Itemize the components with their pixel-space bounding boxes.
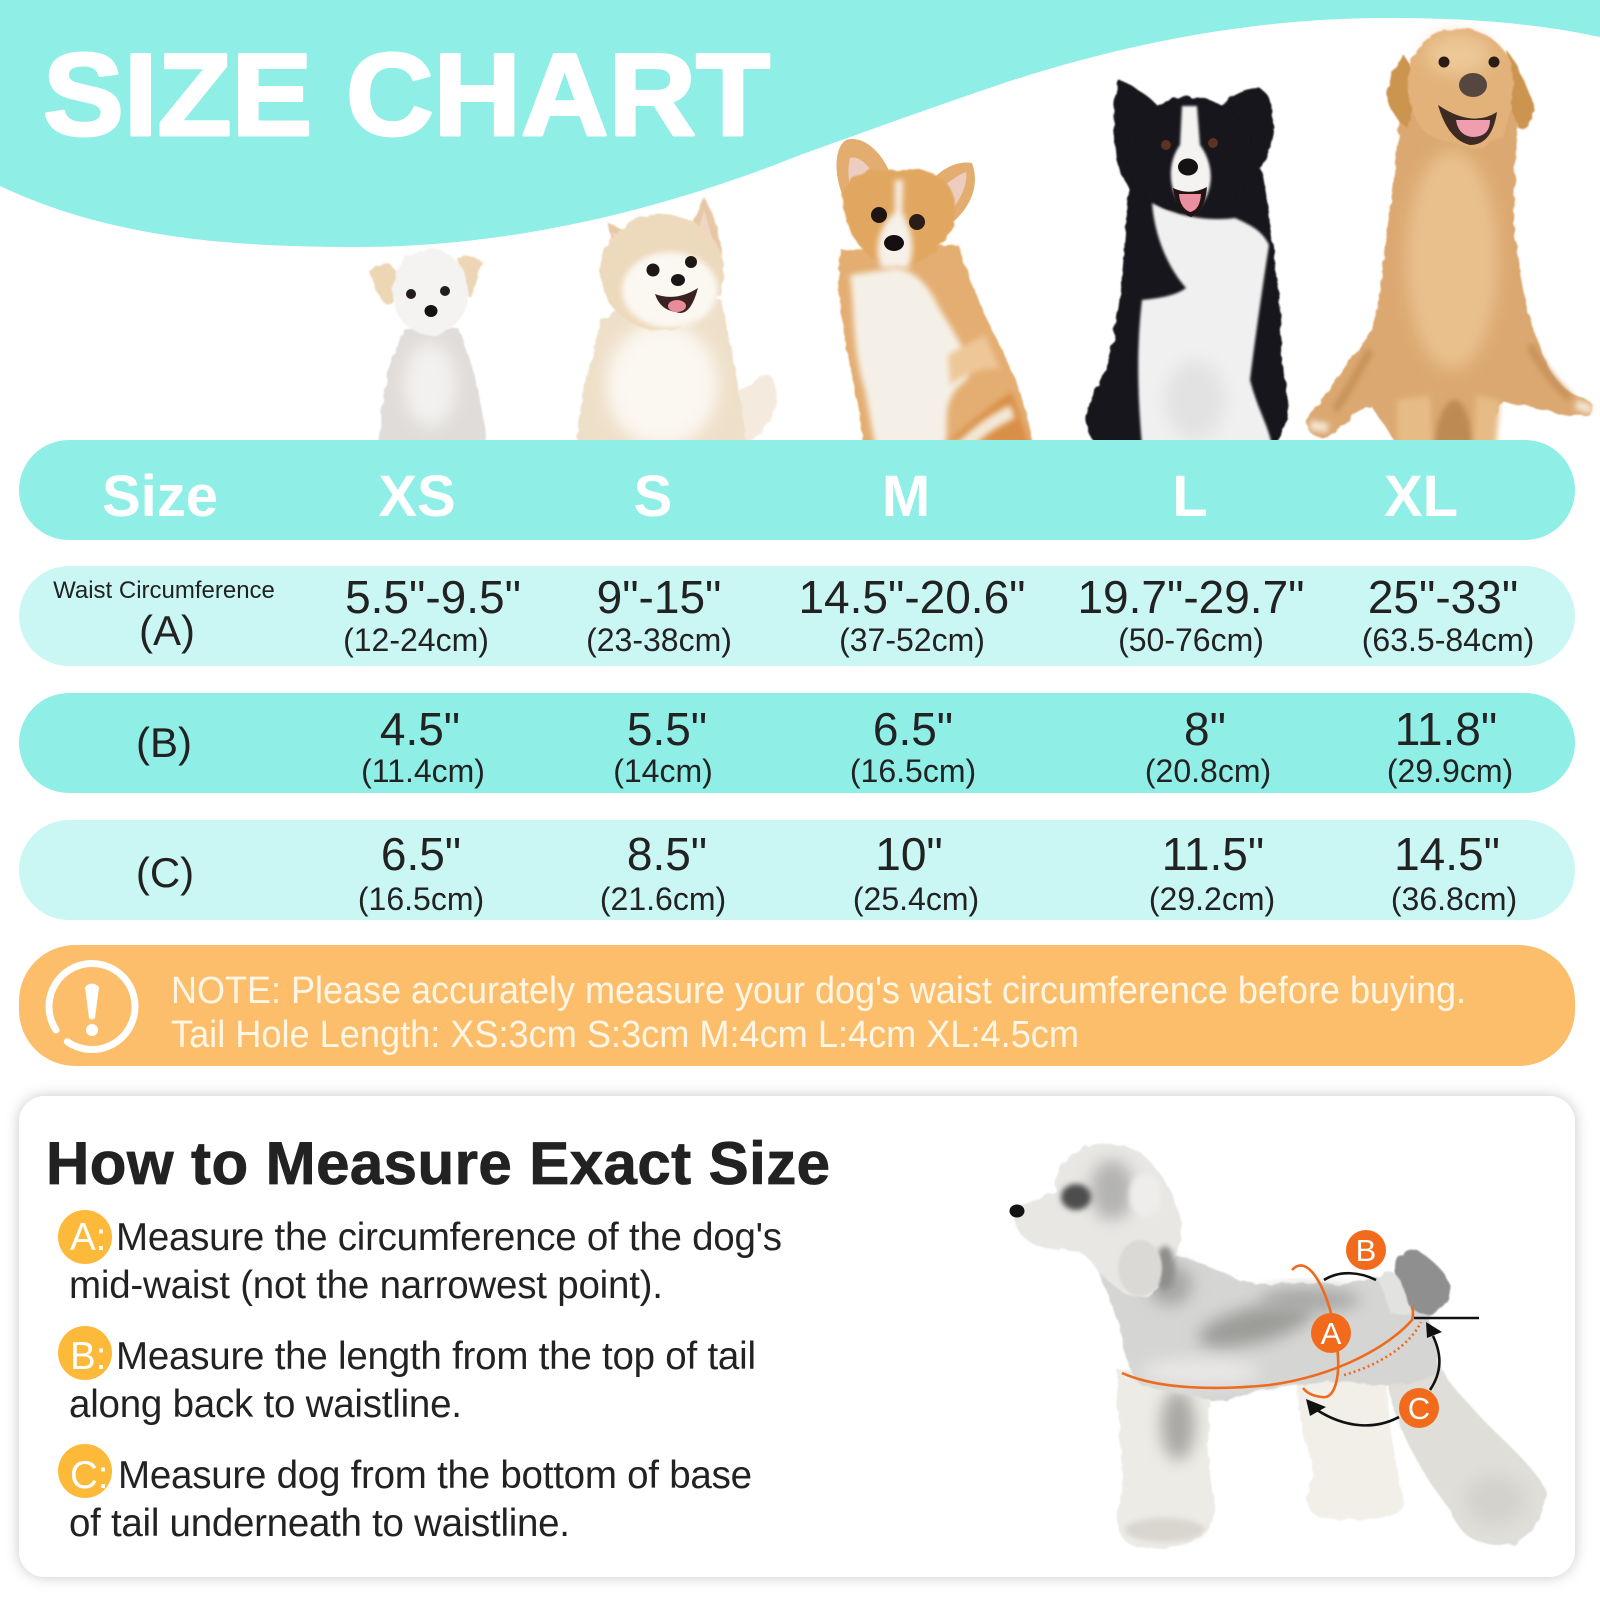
row A: waist circumference: (23-38cm) [586,622,732,658]
header labels: Size [102,464,218,529]
row A: waist circumference: 19.7"-29.7" [1077,571,1305,623]
row B: (14cm) [613,753,713,789]
row C: (C) [136,849,194,896]
step B: along back to waistline. [69,1383,462,1426]
note banner [19,945,1575,1066]
row C: (29.2cm) [1149,881,1275,917]
row C: 11.5" [1162,828,1264,880]
icon: M corgi [836,139,1032,445]
row C: (21.6cm) [600,881,726,917]
dog illustrations row [370,28,1593,447]
row C [19,820,1575,920]
row B: 11.8" [1395,703,1497,755]
step B: Measure the length from the top of tail [116,1335,756,1378]
icon: exclamation [49,964,135,1050]
heading: How to Measure Exact Size [46,1130,830,1197]
step A: mid-waist (not the narrowest point). [69,1264,663,1307]
step B [58,1326,756,1426]
step B: B: [70,1335,106,1378]
row A: waist circumference: (50-76cm) [1118,622,1264,658]
row C: 8.5" [627,828,707,880]
step C [58,1444,752,1545]
tail [1395,1249,1450,1315]
badge C [1399,1388,1439,1428]
header labels: XS [378,464,456,529]
row C: 14.5" [1394,828,1500,880]
step A: A: [70,1216,106,1259]
row C: (16.5cm) [358,881,484,917]
icon: measuring dog photo [1010,1144,1546,1548]
row A: waist circumference: 9"-15" [597,571,721,623]
row A: waist circumference: (63.5-84cm) [1362,622,1534,658]
row C: 10" [875,828,943,880]
row B: (29.9cm) [1387,753,1513,789]
orange measure lines [1122,1265,1421,1397]
step C: Measure dog from the bottom of base [118,1454,752,1497]
row B: (20.8cm) [1145,753,1271,789]
front leg [1117,1370,1214,1548]
row A: waist circumference: 25"-33" [1368,571,1518,623]
row B: (11.4cm) [361,753,485,789]
badge B: B [1356,1233,1376,1268]
row A: waist circumference [19,566,1575,666]
badge A [1311,1313,1351,1353]
row C: 6.5" [381,828,461,880]
icon: L border collie [1086,80,1288,445]
row C: (36.8cm) [1391,881,1517,917]
step A [58,1210,782,1307]
step A: Measure the circumference of the dog's [116,1216,782,1259]
badge A: A [1321,1316,1342,1351]
row B: 5.5" [627,703,707,755]
icon: XL golden retriever [1306,28,1593,445]
note text: NOTE: Please accurately measure your dog's waist circumference before buying. [171,970,1466,1012]
row A: waist circumference: 5.5"-9.5" [345,571,521,623]
row B: (16.5cm) [850,753,976,789]
badge C: C [1408,1391,1430,1426]
row A: waist circumference: (A) [139,607,195,654]
title: SIZE CHART [43,29,770,160]
header labels: S [634,464,672,529]
header labels: XL [1384,464,1458,529]
row A: waist circumference: (37-52cm) [839,622,985,658]
header labels: M [882,464,930,529]
black arrows [1306,1273,1479,1425]
note text [171,970,1466,1056]
step C: of tail underneath to waistline. [69,1502,570,1545]
header wave band [0,0,1600,247]
row A: waist circumference: 14.5"-20.6" [798,571,1026,623]
row C: (25.4cm) [853,881,979,917]
table header pill [19,440,1575,540]
row B: (B) [136,719,192,766]
icon: S pomeranian [578,197,777,447]
header labels [102,464,1458,529]
row B: 6.5" [873,703,953,755]
row A: waist circumference: Waist Circumference [53,577,275,604]
icon: XS white puppy [370,249,484,445]
hind legs [1298,1370,1403,1520]
head [1012,1144,1181,1297]
badge B [1346,1230,1386,1270]
row B: 4.5" [380,703,460,755]
body [1095,1250,1438,1401]
header labels: L [1172,464,1208,529]
note text: Tail Hole Length: XS:3cm S:3cm M:4cm L:4cm XL:4.5cm [171,1014,1079,1056]
step C: C: [70,1454,108,1497]
row A: waist circumference: (12-24cm) [343,622,489,658]
row B: 8" [1184,703,1226,755]
measurement overlays [1122,1265,1479,1425]
panel: how to measure [19,1096,1575,1577]
row B [19,693,1575,793]
